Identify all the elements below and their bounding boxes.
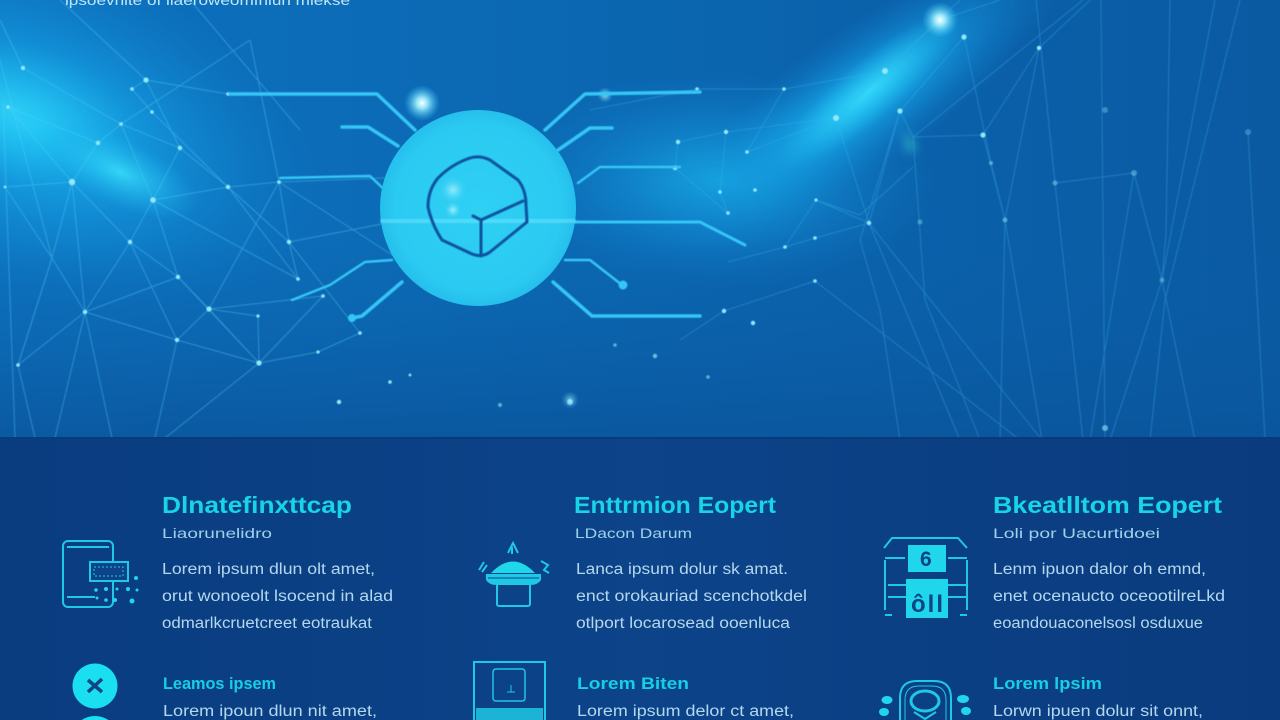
card: heading and text 1: Liaorunelidro <box>162 525 272 541</box>
network nodes <box>4 34 1251 431</box>
icon: hat with sparks <box>479 543 549 606</box>
card: heading and text 2: enct orokauriad scenchotkdel <box>576 588 807 605</box>
card: heading and text 3: enet ocenaucto oceootilreLkd <box>993 588 1225 605</box>
card: lower text 2: Lorem Biten <box>577 674 689 693</box>
card: heading and text 1: odmarlkcruetcreet eotraukat <box>162 615 373 632</box>
icon: cube <box>428 157 527 256</box>
icon: filled circle with cross <box>72 664 118 708</box>
card: heading and text 3: Loli por Uacurtidoei <box>993 525 1160 541</box>
card: heading and text 1: orut wonoeolt lsocend in alad <box>162 588 393 605</box>
icon: tablet <box>63 541 138 607</box>
icon: circuit panel: 6 <box>920 548 932 571</box>
card: lower text 2 <box>577 674 794 720</box>
card: heading and text 3: Bkeatlltom Eopert <box>993 492 1222 518</box>
card: heading and text 1 <box>162 492 393 632</box>
card: heading and text 1: Dlnatefinxttcap <box>162 492 352 518</box>
card: heading and text 3: Lenm ipuon dalor oh emnd, <box>993 561 1206 578</box>
card: heading and text 2: otlport locarosead ooenluca <box>576 615 790 632</box>
card: heading and text 3: eoandouaconelsosl osduxue <box>993 615 1203 632</box>
card: lower text 1: Leamos ipsem <box>163 674 276 693</box>
icon: circuit panel <box>884 538 967 618</box>
card: heading and text 2: Enttrmion Eopert <box>574 492 776 518</box>
panel: lower content <box>0 437 1280 720</box>
network lines: right cluster <box>590 0 1265 440</box>
icon: monitor <box>474 662 545 720</box>
card: lower text 3: Lorwn ipuen dolur sit onnt, <box>993 703 1203 720</box>
card: heading and text 1: Lorem ipsum dlun olt amet, <box>162 561 375 578</box>
card: heading and text 2: LDacon Darum <box>575 525 692 541</box>
panel: network hero background <box>0 0 1280 438</box>
card: lower text 3: Lorem lpsim <box>993 674 1102 693</box>
card: heading and text 3 <box>993 492 1225 632</box>
card: heading and text 2: Lanca ipsum dolur sk amat. <box>576 561 788 578</box>
icon: chip face <box>879 681 971 720</box>
network lines: left cluster <box>0 0 400 438</box>
icon: circuit panel: ôll <box>911 591 943 618</box>
card: lower text 1: Lorem ipoun dlun nit amet, <box>163 703 377 720</box>
icon: partial circle below <box>82 716 108 720</box>
card: lower text 2: Lorem ipsum delor ct amet, <box>577 703 794 720</box>
circuit traces <box>230 92 745 322</box>
glowing nodes <box>404 2 958 409</box>
central disc icon <box>380 110 576 306</box>
card: lower text 3 <box>993 674 1203 720</box>
card: heading and text 2 <box>574 492 807 632</box>
card: lower text 1 <box>163 674 377 720</box>
